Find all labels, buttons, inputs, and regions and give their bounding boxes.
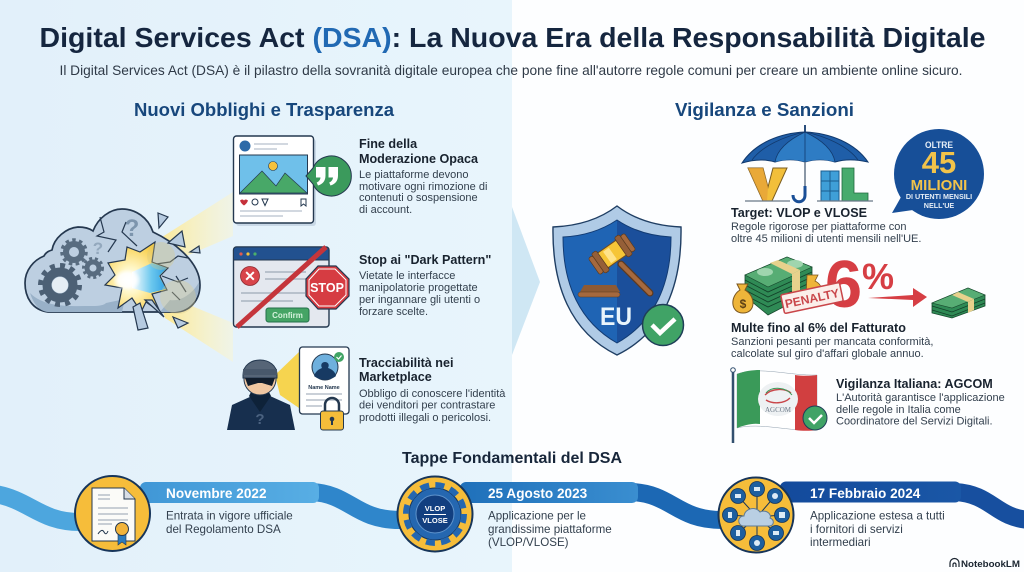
text block: Vigilanza Italiana AGCOM: Vigilanza Italiana: AGCOM — [836, 377, 993, 391]
milestone icon: VLOP VLOSE gear: VLOSE — [422, 516, 448, 525]
milestone 2: 25 Agosto 2023: 25 Agosto 2023 — [488, 486, 588, 501]
letter L — [842, 168, 868, 201]
text block: Stop ai Dark Pattern: Vietate le interfacce — [359, 270, 455, 282]
milestone 2: 25 Agosto 2023: (VLOP/VLOSE) — [488, 536, 569, 549]
money stack — [745, 257, 812, 315]
text block: Vigilanza Italiana AGCOM — [836, 377, 1005, 428]
icon: social post with quote bubble — [234, 136, 351, 226]
heading: Tappe Fondamentali del DSA: Tappe Fondamentali del DSA — [402, 450, 622, 467]
text block: Target VLOP e VLOSE: Target: VLOP e VLOSE — [731, 206, 867, 220]
callout: 45 million users: 45 — [922, 145, 956, 180]
callout: 45 million users: OLTRE — [925, 140, 953, 151]
milestone 3: 17 Febbraio 2024: Applicazione estesa a tutti — [810, 510, 945, 522]
icon: EU shield with gavel — [553, 206, 684, 355]
text block: Fine della Moderazione Opaca: Moderazione Opaca — [359, 152, 479, 166]
building — [821, 171, 839, 201]
6 percent: 6 — [825, 247, 862, 322]
text block: Fine della Moderazione Opaca: di account. — [359, 204, 412, 216]
icon: padlock — [320, 398, 344, 430]
callout: 45 million users: DI UTENTI MENSILI — [906, 192, 972, 201]
icon: small gears — [62, 240, 102, 278]
identity card: Name Name — [308, 385, 340, 391]
heading: Nuovi Obblighi e Trasparenza: Nuovi Obblighi e Trasparenza — [134, 99, 395, 120]
subtitle: Il Digital Services Act (DSA) è il pilastro della sovranità digitale europea che pone fine all'autorre regole comuni per creare un ambiente online sicuro. — [60, 63, 962, 78]
callout: 45 million users — [892, 129, 984, 219]
icon: gavel — [578, 232, 650, 297]
text block: Tracciabilità nei Marketplace: dei venditori per contrastare — [359, 400, 495, 412]
text block: Multe fino al 6% del Fatturato: Sanzioni pesanti per mancata conformità, — [731, 336, 933, 348]
icon: check badge — [642, 304, 684, 346]
icon: umbrella over V and L letters — [742, 125, 873, 202]
timeline ribbon — [0, 482, 1024, 522]
milestone 1: Novembre 2022: Novembre 2022 — [166, 486, 267, 501]
arrow — [868, 288, 927, 307]
small money stack — [932, 288, 985, 318]
text block: Stop ai Dark Pattern: per ingannare gli utenti o — [359, 294, 480, 306]
text block: Stop ai Dark Pattern: forzare scelte. — [359, 306, 428, 318]
milestone icon: VLOP VLOSE gear — [398, 476, 472, 552]
icon: money stack, penalty and 6 percent — [733, 247, 985, 322]
milestone icon: cloud network — [718, 478, 794, 552]
icon: dark pattern browser with stop sign: ✕ — [244, 268, 256, 284]
text block: Fine della Moderazione Opaca: contenuti o sospensione — [359, 192, 478, 204]
thief figure: ? — [255, 411, 265, 428]
button: Confirm: Confirm — [272, 311, 303, 320]
heading: Vigilanza e Sanzioni: Vigilanza e Sanzioni — [675, 99, 854, 120]
icon: anonymous seller and identity card — [227, 347, 349, 430]
icon: explosion star — [105, 242, 168, 312]
milestone 3: 17 Febbraio 2024: 17 Febbraio 2024 — [810, 486, 921, 501]
icon: check badge — [803, 406, 827, 430]
text block: Fine della Moderazione Opaca: Le piattaforme devono — [359, 169, 468, 181]
money bag — [733, 284, 753, 313]
6 percent — [825, 247, 894, 322]
icon: EU shield with gavel: EU — [600, 303, 632, 331]
6 percent: % — [862, 256, 894, 297]
text block: Fine della Moderazione Opaca — [359, 137, 487, 216]
penalty stamp: PENALTY — [784, 286, 841, 311]
milestone 2: 25 Agosto 2023: grandissime piattaforme — [488, 523, 612, 536]
text block: Tracciabilità nei Marketplace: prodotti illegali o pericolosi. — [359, 412, 491, 424]
milestone 3: 17 Febbraio 2024 — [810, 486, 945, 549]
icon: broken cloud with gears — [25, 209, 200, 330]
NotebookLM logo: NotebookLM — [961, 559, 1020, 570]
text block: Multe fino al 6% del Fatturato: Multe fino al 6% del Fatturato — [731, 321, 906, 335]
icon: broken cloud with gears: ? — [125, 215, 139, 242]
shards — [133, 213, 200, 330]
milestone 2: 25 Agosto 2023: Applicazione per le — [488, 510, 586, 522]
text block: Tracciabilità nei Marketplace — [359, 356, 506, 424]
milestone 2: 25 Agosto 2023 — [488, 486, 612, 549]
text block: Target VLOP e VLOSE: oltre 45 milioni di utenti mensili nell'UE. — [731, 233, 921, 245]
text block: Target VLOP e VLOSE — [731, 206, 921, 245]
light beams — [148, 192, 233, 362]
text block: Fine della Moderazione Opaca: motivare ogni rimozione di — [359, 181, 487, 193]
text block: Stop ai Dark Pattern: Stop ai "Dark Pattern" — [359, 253, 491, 267]
milestone icon: VLOP VLOSE gear: VLOP — [425, 504, 445, 513]
milestone 1: Novembre 2022 — [166, 486, 293, 536]
text block: Stop ai Dark Pattern — [359, 253, 491, 318]
money bag: $ — [740, 297, 747, 311]
text block: Tracciabilità nei Marketplace: Marketplace — [359, 370, 432, 384]
icon: quote bubble — [306, 156, 351, 196]
icon: Italian flag with AGCOM: AGCOM — [765, 406, 792, 414]
icon: Italian flag with AGCOM — [731, 368, 827, 443]
milestone icon: Regolamento document — [75, 476, 150, 551]
milestone 3: 17 Febbraio 2024: intermediari — [810, 536, 871, 549]
milestone 1: Novembre 2022: Entrata in vigore ufficiale — [166, 510, 293, 522]
text block: Multe fino al 6% del Fatturato — [731, 321, 933, 360]
icon: broken cloud with gears: ? — [93, 239, 103, 258]
icon: dark pattern browser with stop sign — [234, 247, 349, 327]
icon: large gear — [40, 266, 80, 304]
text block: Tracciabilità nei Marketplace: Obbligo di conoscere l'identità — [359, 388, 506, 400]
text block: Stop ai Dark Pattern: manipolatorie progettate — [359, 282, 478, 294]
callout: 45 million users: NELL'UE — [924, 201, 954, 210]
text block: Tracciabilità nei Marketplace: Tracciabilità nei — [359, 356, 454, 370]
milestone 1: Novembre 2022: del Regolamento DSA — [166, 523, 281, 536]
text block: Vigilanza Italiana AGCOM: delle regole in Italia come — [836, 404, 961, 416]
text block: Fine della Moderazione Opaca: Fine della — [359, 137, 418, 151]
translucent overlaps — [147, 242, 175, 270]
text block: Target VLOP e VLOSE: Regole rigorose per piattaforme con — [731, 221, 906, 233]
text block: Vigilanza Italiana AGCOM: Coordinatore del Servizi Digitali. — [836, 416, 993, 428]
text block: Vigilanza Italiana AGCOM: L'Autorità garantisce l'applicazione — [836, 392, 1005, 404]
title: Digital Services Act (DSA): La Nuova Era della Responsabilità Digitale — [40, 22, 986, 53]
letter V — [748, 168, 787, 201]
icon: stop sign: STOP — [310, 281, 344, 295]
callout: 45 million users: MILIONI — [911, 177, 967, 194]
text block: Multe fino al 6% del Fatturato: calcolate sul giro d'affari globale annuo. — [731, 348, 924, 360]
milestone 3: 17 Febbraio 2024: i fornitori di servizi — [810, 523, 903, 536]
